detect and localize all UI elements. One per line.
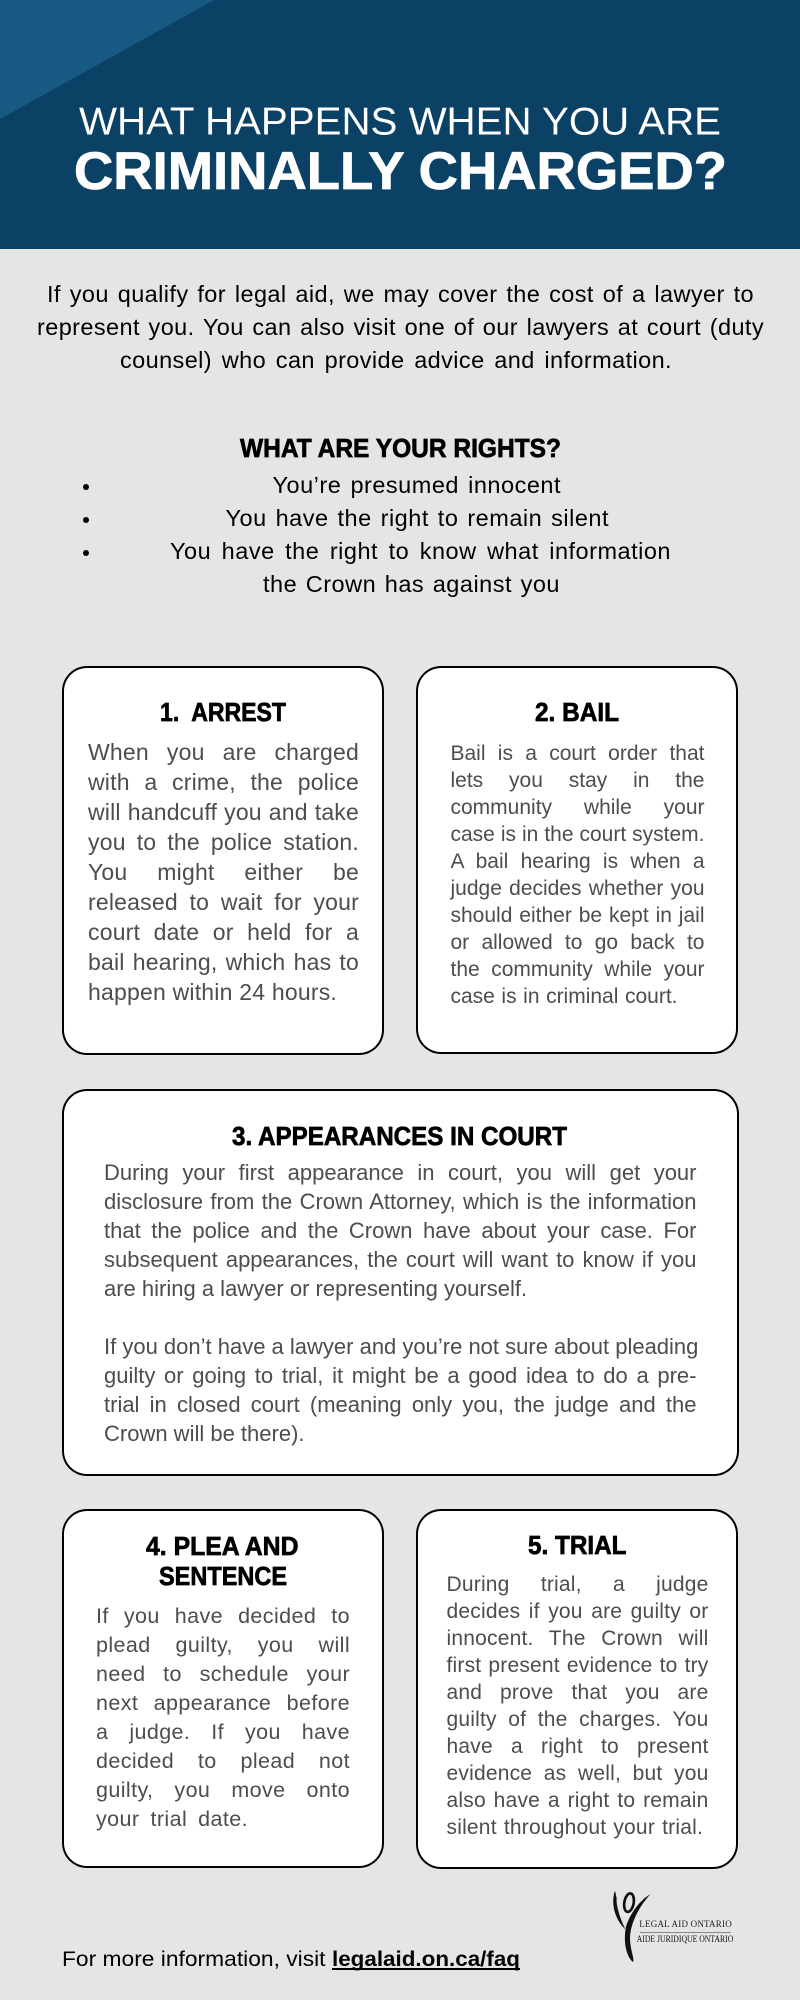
- text: bail: case is in the court system.: [450, 823, 704, 846]
- rights list: You have the right to remain silent: [226, 505, 609, 531]
- text: bail: [450, 742, 705, 1008]
- title: CRIMINALLY CHARGED?: [74, 142, 727, 201]
- text: bail: or allowed to go back to: [450, 931, 704, 954]
- header banner: [0, 0, 800, 249]
- intro paragraph: represent you. You can also visit one of our lawyers at court (duty: [37, 314, 764, 340]
- text: arrest: When you are charged: [88, 739, 359, 765]
- text: appearances in court: are hiring a lawyer or representing yourself.: [104, 1276, 527, 1301]
- rights list: the Crown has against you: [263, 571, 560, 597]
- text: trial: decides if you are guilty or: [446, 1600, 708, 1623]
- text: arrest: will handcuff you and take: [88, 799, 359, 825]
- text: appearances in court: subsequent appearances, the court will want to know if you: [104, 1247, 696, 1272]
- text: plea and sentence: guilty, you move onto: [96, 1778, 350, 1802]
- panel: 2. bail: [416, 666, 738, 1054]
- text: trial: also have a right to remain: [446, 1789, 708, 1812]
- text: arrest: You might either be: [88, 859, 359, 885]
- text: bail: lets you stay in the: [450, 769, 704, 792]
- panel: 1. arrest: [62, 666, 384, 1055]
- intro paragraph: counsel) who can provide advice and information.: [120, 347, 672, 373]
- text: bail: the community while your: [450, 958, 704, 981]
- text: arrest: released to wait for your: [88, 889, 359, 915]
- text: bail: A bail hearing is when a: [450, 850, 704, 873]
- text: arrest: with a crime, the police: [88, 769, 359, 795]
- text: arrest: happen within 24 hours.: [88, 979, 337, 1005]
- text: appearances in court: that the police and the Crown have about your case. For: [104, 1218, 696, 1243]
- rights list bullets: [83, 484, 89, 556]
- panel: 4. plea and sentence: [62, 1509, 384, 1868]
- text: appearances in court: guilty or going to trial, it might be a good idea to do a pre-: [104, 1363, 696, 1388]
- text: appearances in court: If you don’t have a lawyer and you’re not sure about pleading: [104, 1334, 698, 1359]
- heading: trial: 5. TRIAL: [528, 1530, 626, 1560]
- text: appearances in court: During your first appearance in court, you will get your: [104, 1160, 696, 1185]
- rights list: [170, 472, 671, 597]
- text: trial: [446, 1573, 708, 1839]
- footer call to action: [62, 1947, 520, 1971]
- text: plea and sentence: next appearance before: [96, 1691, 350, 1715]
- heading: arrest: 1. ARREST: [160, 697, 286, 727]
- text: appearances in court: disclosure from the Crown Attorney, which is the information: [104, 1189, 696, 1214]
- rights list: You’re presumed innocent: [272, 472, 561, 498]
- panel: 3. appearances in court: [62, 1089, 738, 1476]
- text: appearances in court: [104, 1160, 698, 1446]
- heading: plea and sentence: 4. PLEA AND: [146, 1530, 298, 1560]
- text: trial: evidence as well, but you: [446, 1762, 708, 1785]
- logo: Legal Aid Ontario: AIDE JURIDIQUE ONTARIO: [637, 1934, 734, 1944]
- text: bail: Bail is a court order that: [450, 742, 704, 765]
- footer call to action: For more information, visit: [62, 1947, 326, 1971]
- title: [74, 100, 727, 201]
- text: plea and sentence: If you have decided to: [96, 1604, 350, 1628]
- text: trial: have a right to present: [446, 1735, 708, 1758]
- text: plea and sentence: a judge. If you have: [96, 1720, 350, 1744]
- text: trial: and prove that you are: [446, 1681, 708, 1704]
- intro paragraph: If you qualify for legal aid, we may cover the cost of a lawyer to: [47, 281, 754, 307]
- rights heading: WHAT ARE YOUR RIGHTS?: [240, 433, 561, 463]
- heading: plea and sentence: [146, 1530, 298, 1590]
- text: plea and sentence: need to schedule your: [96, 1662, 350, 1686]
- text: plea and sentence: plead guilty, you will: [96, 1633, 350, 1657]
- text: plea and sentence: [96, 1604, 350, 1831]
- text: arrest: bail hearing, which has to: [88, 949, 359, 975]
- text: bail: community while your: [450, 796, 704, 819]
- footer call to action: legalaid.on.ca/faq: [332, 1947, 520, 1971]
- text: appearances in court: Crown will be there).: [104, 1421, 305, 1446]
- text: appearances in court: trial in closed court (meaning only you, the judge and the: [104, 1392, 696, 1417]
- text: bail: case is in criminal court.: [450, 985, 678, 1008]
- text: bail: should either be kept in jail: [450, 904, 704, 927]
- text: trial: silent throughout your trial.: [446, 1816, 703, 1839]
- text: trial: During trial, a judge: [446, 1573, 708, 1596]
- rights list: You have the right to know what information: [170, 538, 671, 564]
- title: WHAT HAPPENS WHEN YOU ARE: [79, 100, 721, 144]
- text: arrest: [88, 739, 359, 1005]
- logo: Legal Aid Ontario: LEGAL AID ONTARIO: [639, 1919, 732, 1929]
- panel: 5. trial: [416, 1509, 738, 1869]
- text: trial: guilty of the charges. You: [446, 1708, 708, 1731]
- text: plea and sentence: decided to plead not: [96, 1749, 350, 1773]
- heading: appearances in court: 3. APPEARANCES IN COURT: [232, 1121, 567, 1151]
- text: arrest: you to the police station.: [88, 829, 359, 855]
- text: trial: innocent. The Crown will: [446, 1627, 708, 1650]
- text: plea and sentence: your trial date.: [96, 1807, 248, 1831]
- text: bail: judge decides whether you: [450, 877, 704, 900]
- heading: bail: 2. BAIL: [535, 697, 619, 727]
- logo: Legal Aid Ontario: [613, 1890, 734, 1962]
- text: trial: first present evidence to try: [446, 1654, 708, 1677]
- intro paragraph: [37, 281, 764, 373]
- heading: plea and sentence: SENTENCE: [159, 1560, 287, 1590]
- decorative light blue corner triangle: [0, 0, 214, 119]
- text: arrest: court date or held for a: [88, 919, 359, 945]
